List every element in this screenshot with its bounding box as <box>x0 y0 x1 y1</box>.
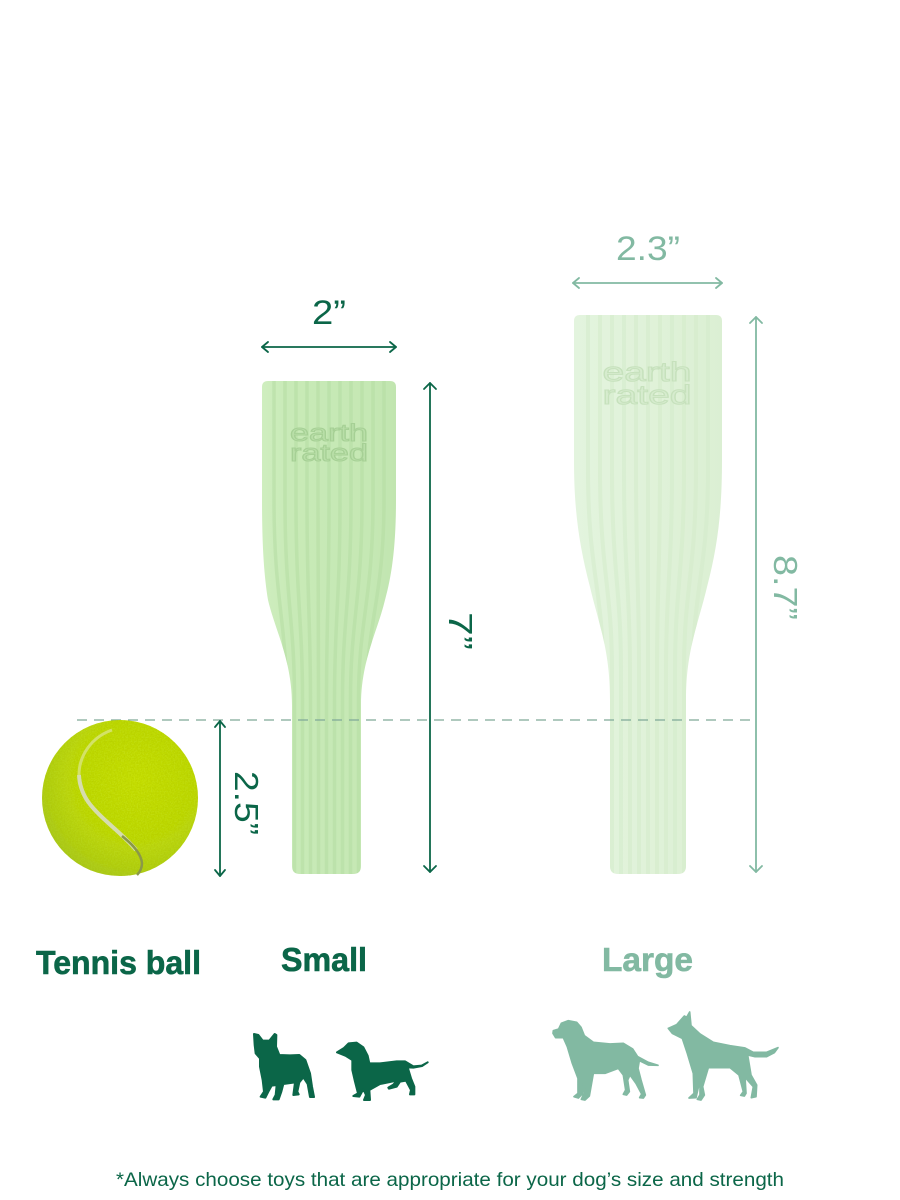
icon: small dogs <box>254 1034 428 1100</box>
heading: tennis ball: Tennis ball <box>36 944 201 981</box>
small toy <box>262 381 396 874</box>
footnote: *Always choose toys that are appropriate for your dog’s size and strength <box>116 1169 784 1191</box>
label: 7 inch: 7” <box>442 612 479 650</box>
label: 2.5 inch: 2.5” <box>228 771 265 835</box>
icon: large dogs <box>553 1012 778 1100</box>
arrow: small width <box>262 342 396 352</box>
label: 2 inch: 2” <box>312 294 346 332</box>
arrow: large height <box>750 317 762 872</box>
large toy <box>574 315 722 874</box>
embossed logo: small toy: rated <box>290 440 368 467</box>
embossed logo: large toy: earth <box>602 357 692 387</box>
arrow: large width <box>573 278 722 288</box>
icon: tennis ball <box>42 720 198 876</box>
heading: large: Large <box>602 941 693 978</box>
arrow: small height <box>424 383 436 872</box>
label: 2.3 inch: 2.3” <box>616 230 680 268</box>
embossed logo: large toy <box>602 357 692 410</box>
embossed logo: large toy: rated <box>602 380 692 410</box>
infographic: toy size comparison <box>36 236 798 1190</box>
embossed logo: small toy <box>290 420 368 467</box>
arrow: 2.5 inch height <box>215 721 225 876</box>
heading: small: Small <box>281 941 367 978</box>
dashed reference line <box>77 719 755 721</box>
embossed logo: small toy: earth <box>290 420 368 447</box>
label: 8.7 inch: 8.7” <box>767 555 804 620</box>
